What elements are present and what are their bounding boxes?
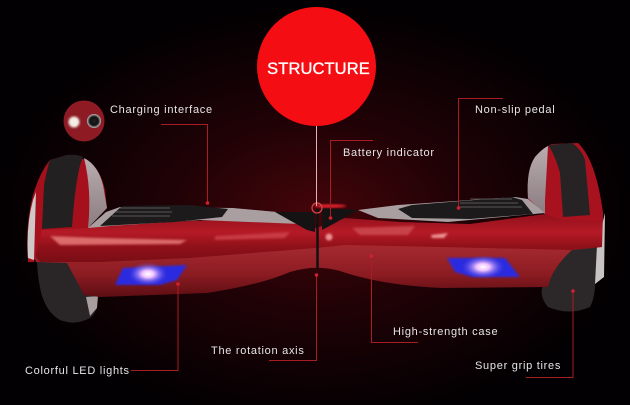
label: super grip tires: Super grip tires: [475, 360, 561, 372]
right tread pad: [548, 143, 590, 217]
label: charging interface: Charging interface: [110, 104, 213, 116]
hoverboard: [27, 143, 605, 323]
right LED light: [447, 255, 520, 279]
left fender: [27, 155, 107, 262]
right fender: [528, 143, 603, 222]
callout lines: [131, 98, 573, 378]
title circle: [257, 7, 376, 126]
left tread pad: [42, 155, 83, 229]
left LED light: [115, 262, 187, 286]
upper body: [28, 213, 603, 262]
icon: charging port: [64, 100, 104, 142]
label: high-strength case: High-strength case: [393, 326, 498, 338]
lower body: [30, 235, 602, 297]
deck right: [358, 197, 545, 222]
battery indicator housing: [275, 203, 358, 268]
label: non-slip pedal: Non-slip pedal: [475, 104, 555, 116]
label: battery indicator: Battery indicator: [343, 147, 435, 159]
label: rotation axis: The rotation axis: [211, 345, 305, 357]
deck left: [88, 205, 300, 228]
left wheel: [37, 258, 98, 323]
label: LED lights: Colorful LED lights: [25, 365, 130, 377]
right wheel: [542, 213, 605, 312]
title: STRUCTURE: [267, 60, 370, 78]
body highlights: [50, 226, 448, 245]
callout dots: [176, 201, 575, 293]
